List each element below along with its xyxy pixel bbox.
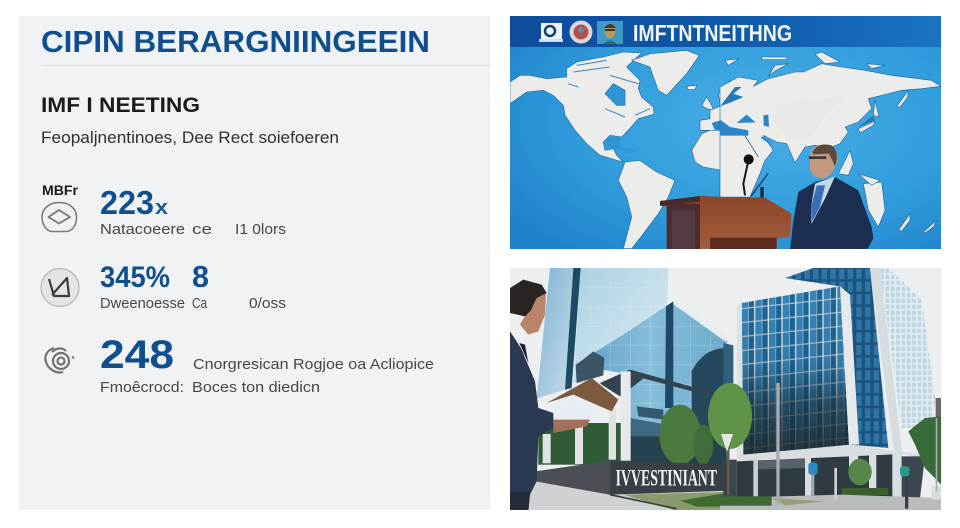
lectern [660,154,792,250]
header title: IMFTNTNEITHNG [633,20,792,46]
stat value: 223 [100,184,154,221]
stat value: 345% [100,261,170,294]
map: Americas and Greenland [510,50,730,249]
stat row 2 [41,259,286,312]
icon: logo badge [539,23,563,42]
stat side text: Cnorgresican Rogjoe oa Acliopice [193,356,434,373]
row label: MBFr [42,182,79,198]
panel: left text panel [19,16,490,510]
icon: circle with triangle [41,268,79,306]
stat caption: Boces ton diedicn [192,379,320,396]
back glass tower [537,268,668,399]
title: CIPIN BERARGNIINGEEIN [41,24,430,59]
stat row 3 [45,333,434,396]
speaker [790,144,873,250]
adjacent building [723,343,733,386]
panel: meeting photo with world map [510,16,941,250]
street signs and lamp post [776,383,937,509]
stat caption: Natacoeere [100,221,185,238]
stat caption [100,379,320,396]
front glass building [575,301,727,466]
stat value: 248 [100,333,174,377]
sign text: IVVESTINIANT [616,465,717,491]
icon: swirl rings [45,348,74,372]
stat row 2: 8 [192,259,209,294]
panel: investment buildings photo [510,268,942,511]
ground and lawn [528,481,728,511]
trees and hedges [842,416,941,495]
description text: Feopaljnentinoes, Dee Rect soiefoeren [41,128,339,147]
header bar [510,16,941,47]
icon: square portrait [597,21,623,44]
left building group [528,268,728,511]
street tree and yield sign [708,383,752,495]
subheading: IMF I NEETING [41,94,200,117]
stat caption: Fmoêcrocd: [100,379,184,396]
tower facades [723,268,942,500]
stat caption: Dweenoesse [100,295,185,312]
stat caption: ce [192,221,212,238]
stat caption: 0/oss [249,295,286,312]
stat caption [100,295,286,312]
stat row 1: x [155,197,168,219]
monument sign wall [536,461,729,495]
right office tower group [720,268,942,511]
stat caption: Ca [192,295,208,312]
businessman holding folder [510,280,618,511]
icon: rounded ring with diamond [42,202,76,232]
map: Europe, Asia, Africa, Oceania [720,52,941,233]
icon: round portrait [570,20,592,44]
stat caption [100,221,286,238]
road and lawn [720,486,942,511]
stat row 1 [42,182,286,238]
stat caption: I1 0lors [235,221,286,238]
tree backdrop and columns [538,371,727,465]
